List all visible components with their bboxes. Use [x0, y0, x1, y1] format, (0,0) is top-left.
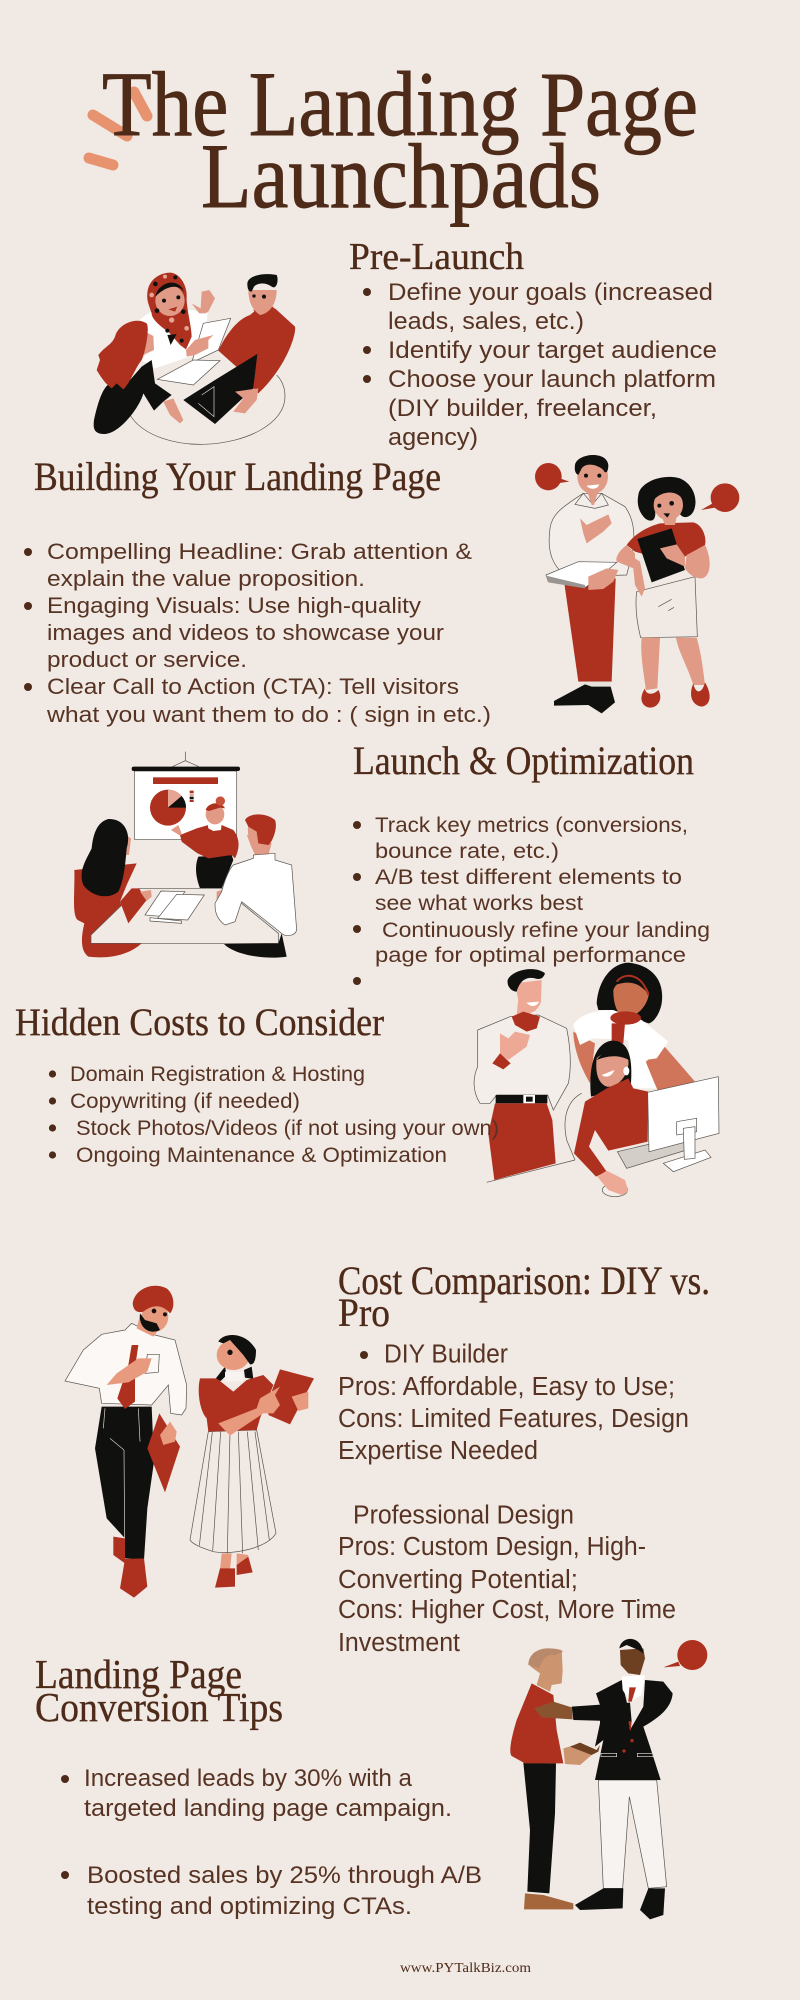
heading: launch & optimization: Launch & Optimization: [353, 738, 694, 783]
illustration: presentation meeting: [74, 752, 297, 958]
list: cost comparison details: Converting Potential;: [338, 1566, 578, 1594]
list: pre-launch bullets: leads, sales, etc.): [388, 308, 584, 335]
panel: building your landing page text: [24, 454, 491, 727]
list: building bullets: explain the value proposition.: [47, 566, 365, 591]
panel: hidden costs text: [15, 1001, 499, 1167]
list: pre-launch bullets: (DIY builder, freelancer,: [388, 395, 657, 422]
heading: pre-launch: Pre-Launch: [349, 236, 524, 278]
title: The Landing Page: [102, 53, 698, 155]
list: cost comparison details: Pros: Affordable, Easy to Use;: [338, 1373, 675, 1401]
heading: conversion tips: [35, 1651, 283, 1730]
heading: cost comparison: [338, 1258, 710, 1335]
list: cost comparison details: Cons: Higher Cost, More Time: [338, 1596, 676, 1624]
list: hidden cost bullets: [49, 1063, 499, 1167]
panel: conversion tips text: [35, 1651, 482, 1920]
heading: hidden costs: Hidden Costs to Consider: [15, 1001, 384, 1044]
list: hidden cost bullets: Domain Registration & Hosting: [70, 1063, 365, 1086]
list: pre-launch bullets: Define your goals (increased: [388, 279, 713, 306]
list: conversion bullets: [61, 1765, 482, 1920]
list: cost comparison details: Pros: Custom Design, High-: [338, 1533, 646, 1561]
illustration: man in turban and woman with folder: [65, 1286, 314, 1598]
list: cost comparison details: Investment: [338, 1629, 460, 1657]
list: pre-launch bullets: Choose your launch platform: [388, 366, 716, 393]
list: cost comparison details: Cons: Limited Features, Design: [338, 1405, 689, 1433]
list: cost comparison details: [338, 1340, 689, 1657]
list: building bullets: Clear Call to Action (CTA): Tell visitors: [47, 674, 459, 699]
heading: conversion tips: Landing Page: [35, 1651, 242, 1697]
list: conversion bullets: Boosted sales by 25% through A/B: [87, 1862, 482, 1889]
heading: cost comparison: Cost Comparison: DIY vs.: [338, 1258, 710, 1303]
illustration: three colleagues at a computer: [474, 963, 719, 1197]
illustration: team around a table: [94, 273, 295, 444]
panel: pre-launch text: [349, 236, 717, 451]
list: building bullets: images and videos to showcase your: [47, 620, 445, 645]
illustration: couple with speech bubbles: [535, 455, 739, 713]
list: building bullets: Engaging Visuals: Use high-quality: [47, 593, 422, 618]
footer: website: www.PYTalkBiz.com: [400, 1961, 531, 1976]
panel: cost comparison text: [338, 1258, 710, 1657]
list: launch bullets: Track key metrics (conversions,: [375, 813, 688, 837]
list: conversion bullets: targeted landing page campaign.: [84, 1795, 452, 1822]
list: conversion bullets: testing and optimizing CTAs.: [87, 1893, 412, 1920]
heading: cost comparison: Pro: [338, 1290, 390, 1335]
list: launch bullets: [353, 813, 710, 985]
list: launch bullets: see what works best: [375, 891, 583, 915]
heading: conversion tips: Conversion Tips: [35, 1684, 283, 1730]
icon: accent strokes: [89, 92, 147, 165]
panel: launch and optimization text: [353, 738, 710, 985]
list: conversion bullets: Increased leads by 30% with a: [84, 1765, 413, 1792]
list: building bullets: product or service.: [47, 647, 247, 672]
list: launch bullets: page for optimal performance: [375, 943, 686, 967]
list: cost comparison details: DIY Builder: [384, 1340, 508, 1368]
heading: building your landing page: Building Your Landing Page: [34, 454, 441, 499]
list: building bullets: Compelling Headline: Grab attention &: [47, 539, 472, 564]
list: cost comparison details: Expertise Needed: [338, 1437, 538, 1465]
list: hidden cost bullets: Ongoing Maintenance & Optimization: [76, 1144, 447, 1167]
list: building bullets: [24, 539, 491, 727]
list: hidden cost bullets: Stock Photos/Videos (if not using your own): [76, 1117, 499, 1140]
list: cost comparison details: Professional Design: [353, 1502, 574, 1530]
list: pre-launch bullets: agency): [388, 424, 478, 451]
list: building bullets: what you want them to do : ( sign in etc.): [46, 702, 491, 727]
title: Launchpads: [201, 125, 601, 227]
list: hidden cost bullets: Copywriting (if needed): [70, 1090, 300, 1113]
title: [102, 53, 698, 227]
list: pre-launch bullets: Identify your target audience: [388, 337, 717, 364]
list: pre-launch bullets: [363, 279, 717, 451]
list: launch bullets: A/B test different elements to: [375, 865, 682, 889]
illustration: two men shaking hands: [510, 1639, 707, 1919]
list: launch bullets: Continuously refine your landing: [382, 918, 710, 942]
list: launch bullets: bounce rate, etc.): [375, 839, 559, 863]
